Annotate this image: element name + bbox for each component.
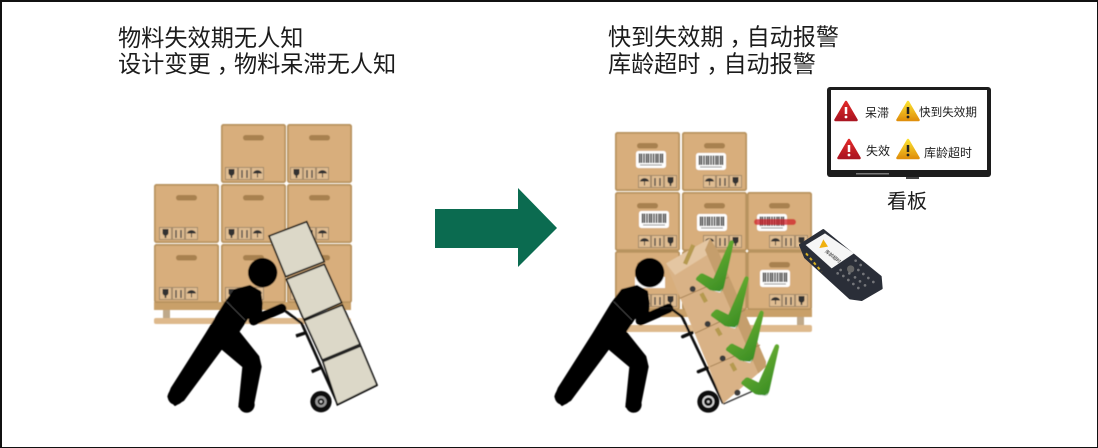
heading: current problems xyxy=(118,25,396,77)
panel: managed warehouse scene xyxy=(555,133,812,413)
panel: unmanaged warehouse scene xyxy=(154,125,377,413)
alert: overage stock: 库龄超时 xyxy=(924,145,972,160)
green check marks xyxy=(696,240,779,397)
heading: automatic alerts xyxy=(608,24,839,77)
handheld scanner: 库龄超时 xyxy=(823,248,843,265)
alert: near expiry: 快到失效期 xyxy=(919,105,977,119)
alert: stagnant: 呆滞 xyxy=(865,106,889,120)
heading: current problems: 物料失效期无人知 xyxy=(118,25,304,51)
alert: expired: 失效 xyxy=(866,143,890,158)
stacked cartons left xyxy=(155,125,351,302)
pallet left xyxy=(154,302,351,324)
dashboard monitor xyxy=(827,87,991,179)
handheld scanner xyxy=(800,230,882,300)
alert: overage stock xyxy=(898,140,972,160)
arrow: transition xyxy=(435,188,557,267)
alert: near expiry xyxy=(898,102,977,120)
pallet right xyxy=(615,309,812,332)
alert: expired xyxy=(838,140,890,158)
hand truck with plain cartons left xyxy=(269,222,377,412)
heading: current problems: 设计变更 ，物料呆滞无人知 xyxy=(118,51,396,77)
barcoded cartons xyxy=(616,133,811,309)
heading: automatic alerts: 库龄超时 ，自动报警 xyxy=(608,51,816,77)
worker left xyxy=(168,258,282,413)
worker right xyxy=(555,258,669,413)
alert: stagnant xyxy=(836,102,889,120)
monitor caption: 看板 xyxy=(887,190,927,213)
hand truck with checked cartons xyxy=(660,238,779,413)
heading: automatic alerts: 快到失效期 ，自动报警 xyxy=(608,24,839,50)
